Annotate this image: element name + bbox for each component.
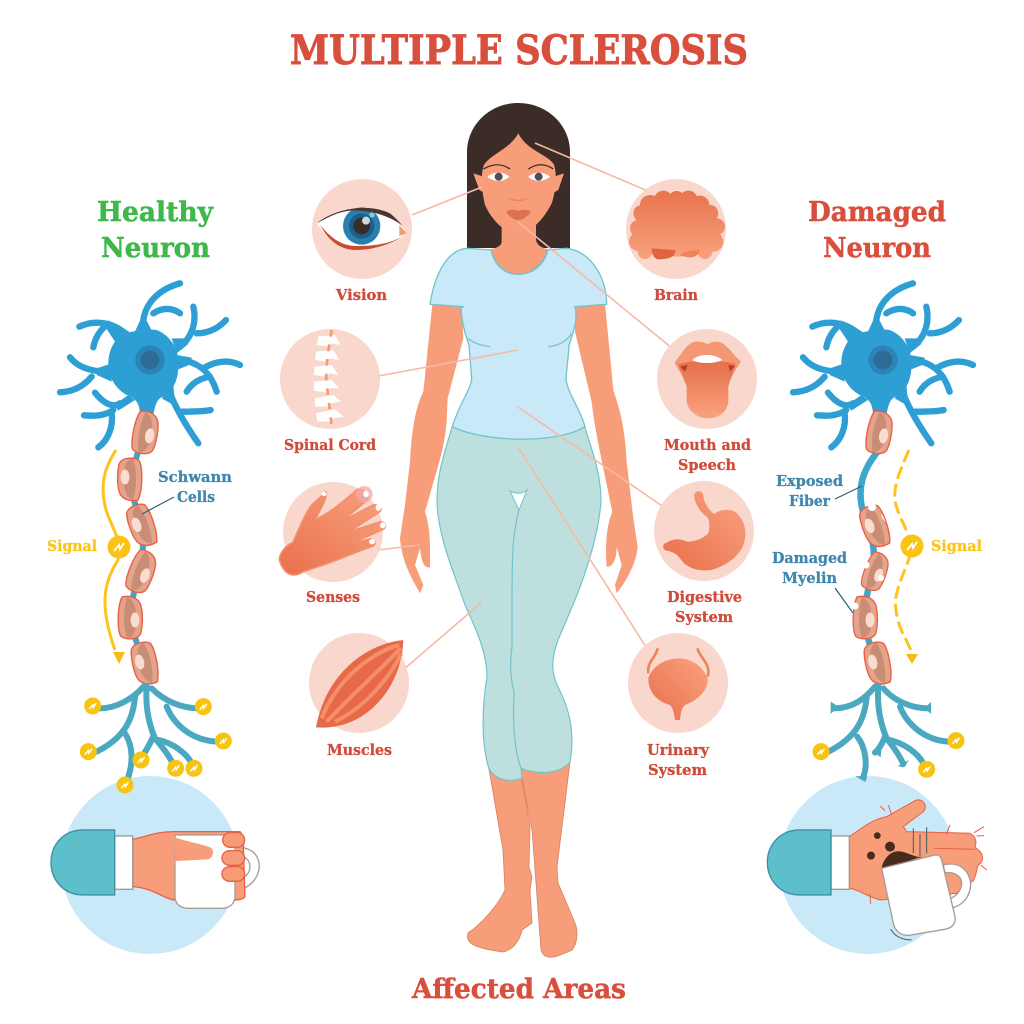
leggings [437, 427, 601, 780]
cuff [831, 836, 849, 889]
nose [509, 198, 527, 200]
label: Muscles [327, 741, 392, 759]
neck [491, 223, 547, 274]
signal arrow dashed: Signal [931, 537, 982, 555]
tremor marks [870, 805, 987, 940]
label [667, 588, 742, 626]
heading: healthy neuron: Neuron [101, 233, 210, 264]
exposed fibre [860, 410, 879, 685]
heading: damaged neuron: Damaged [808, 197, 946, 228]
arm right [575, 303, 638, 593]
mug handle [237, 847, 259, 891]
connector lines [373, 143, 678, 670]
signal arrow dashed [895, 450, 982, 664]
signal arrow: Signal [47, 537, 97, 555]
mug body [175, 835, 235, 908]
leggings inner seam [511, 510, 521, 768]
callout: schwann cells: Schwann [158, 468, 232, 486]
callout: schwann cells: Cells [177, 488, 215, 506]
thumb [166, 837, 213, 866]
neuron cell body and dendrites [793, 283, 973, 447]
icon: spinal cord [280, 329, 380, 454]
sleeve [51, 830, 115, 895]
callout: exposed fiber [776, 472, 862, 510]
crotch gap [510, 490, 527, 510]
cuff [115, 836, 133, 889]
heading: healthy neuron: Healthy [97, 197, 214, 228]
coffee spill [867, 832, 920, 870]
icon: urinary system bladder [628, 633, 728, 779]
panel: damaged neuron diagram [772, 283, 982, 782]
hair [467, 103, 570, 248]
collar line [491, 249, 547, 274]
label: System [675, 608, 733, 626]
label: Urinary [647, 741, 710, 759]
sleeve [767, 830, 831, 895]
label: System [648, 761, 707, 779]
heading: healthy neuron [97, 197, 214, 264]
callout: damaged myelin [772, 549, 853, 613]
title: MULTIPLE SCLEROSIS [290, 27, 748, 74]
panel: healthy hand holding mug [51, 776, 259, 954]
neuron cell body and dendrites [60, 283, 240, 447]
axon terminals damaged [812, 687, 964, 782]
panel: damaged hand dropping mug [767, 776, 987, 954]
lips [506, 210, 531, 220]
hand [133, 832, 245, 900]
label [647, 741, 710, 779]
schwann cells [118, 410, 161, 687]
footer heading: Affected Areas [411, 974, 626, 1005]
callout: damaged myelin: Damaged [772, 549, 847, 567]
icon: muscles [309, 633, 409, 759]
panel: healthy neuron diagram [47, 283, 240, 793]
callout: schwann cells [142, 468, 232, 514]
eyebrows [483, 165, 553, 169]
heading: damaged neuron: Neuron [823, 233, 931, 264]
icon: senses hand [279, 482, 385, 606]
icon: brain [626, 179, 726, 304]
label: Spinal Cord [284, 436, 376, 454]
axon terminals [80, 687, 232, 793]
label: Brain [654, 286, 698, 304]
label: Mouth and [664, 436, 751, 454]
panel: female figure [400, 103, 638, 957]
face [482, 133, 556, 234]
icon: digestive system stomach [654, 481, 754, 626]
label: Senses [306, 588, 360, 606]
label: Digestive [667, 588, 742, 606]
mug handle [943, 864, 971, 908]
axon [131, 410, 147, 685]
label: Vision [335, 286, 387, 304]
heading: damaged neuron [808, 197, 946, 264]
arm left [400, 304, 463, 593]
callout: exposed fiber: Exposed [776, 472, 843, 490]
label [664, 436, 751, 474]
hand [849, 800, 983, 900]
callout: damaged myelin: Myelin [782, 569, 837, 587]
lower legs and feet [467, 762, 577, 957]
icon: mouth and tongue [657, 329, 757, 474]
eyes [487, 173, 550, 181]
fingers [222, 833, 245, 881]
finger line [933, 847, 975, 851]
label: Speech [678, 456, 736, 474]
ears [473, 173, 564, 193]
head [473, 133, 564, 274]
signal arrow [47, 450, 130, 664]
icon: vision eye [312, 179, 412, 304]
mug body [882, 855, 955, 935]
damaged myelin cells [852, 410, 895, 687]
callout: exposed fiber: Fiber [789, 492, 831, 510]
shirt [430, 248, 607, 439]
